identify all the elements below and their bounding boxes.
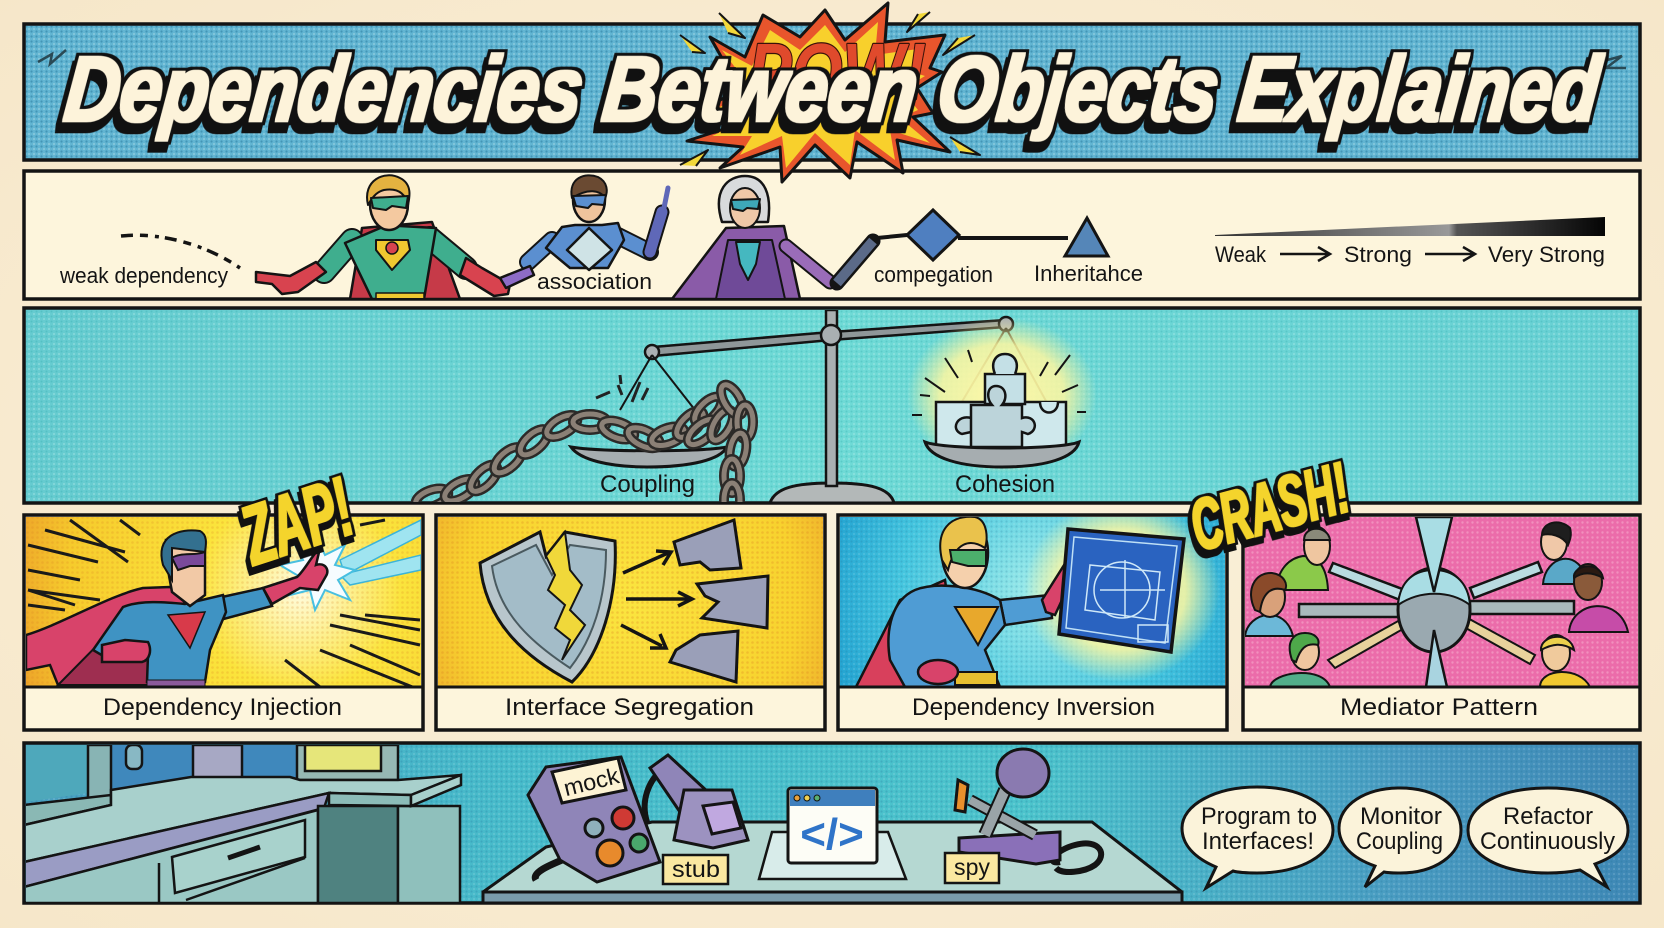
hero: blue hero: [500, 175, 668, 288]
card: mediator pattern: [1243, 515, 1640, 730]
illustration: cracked shield and shards: [436, 515, 825, 687]
label: stub: [663, 855, 728, 884]
panel: testing workbench: [24, 743, 1640, 903]
speech bubble: program to interfaces: [1182, 787, 1333, 888]
strength scale labels: Very Strong: [1488, 242, 1605, 267]
speech bubble: monitor coupling: [1339, 788, 1461, 887]
sound effect: ZAP: ZAP!: [229, 459, 364, 583]
dashed weak dependency line: [121, 235, 240, 268]
hero: green hero: [256, 175, 510, 300]
cohesion glow: [907, 317, 1097, 473]
strength scale labels: [1215, 242, 1605, 267]
left pan: [571, 447, 727, 467]
strength wedge: [1215, 217, 1605, 236]
illustration: kitchen counter: [24, 745, 461, 903]
icon: puzzle pieces: [936, 354, 1066, 448]
speech bubble: refactor continuously: Continuously: [1480, 828, 1615, 855]
card: interface segregation: [436, 515, 825, 730]
icon: code window: [788, 788, 877, 863]
hero: purple heroine: [672, 176, 830, 299]
label: dependency injection: Dependency Injection: [103, 694, 342, 721]
label: interface segregation: Interface Segregation: [505, 694, 754, 721]
icon: code window: </>: [800, 810, 864, 859]
card: dependency inversion: [838, 498, 1227, 730]
label: spy: [945, 853, 999, 883]
speech bubble: program to interfaces: Program to: [1201, 803, 1317, 830]
label: weak dependency: weak dependency: [59, 263, 228, 288]
speech bubble: refactor continuously: Refactor: [1503, 803, 1593, 830]
label: association: association: [537, 269, 652, 294]
panel: coupling vs cohesion balance: [24, 308, 1640, 517]
strength scale labels: Weak: [1215, 242, 1267, 267]
balance scale: [620, 310, 1052, 503]
panel: title banner: [24, 24, 1640, 160]
icon: inheritance triangle: [1065, 218, 1108, 256]
device: spy: [955, 749, 1101, 872]
speech bubble: monitor coupling: Monitor: [1360, 803, 1442, 830]
icon: glow rays: [912, 350, 1086, 415]
speech bubble: refactor continuously: [1468, 788, 1628, 887]
explosion burst: [680, 3, 980, 182]
card: dependency injection: [24, 515, 423, 730]
speech bubble: program to interfaces: Interfaces!: [1202, 828, 1314, 855]
arm and glove: [220, 588, 272, 620]
label: mediator pattern: Mediator Pattern: [1340, 694, 1538, 721]
panel: relationship strip: [24, 171, 1640, 300]
label: dependency inversion: Dependency Inversion: [912, 694, 1155, 721]
icon: heavy chain: [413, 375, 753, 517]
label: cohesion: Cohesion: [955, 471, 1055, 498]
label: inheritance: Inheritahce: [1034, 261, 1143, 286]
label: coupling: Coupling: [600, 471, 695, 498]
device: mock: [528, 757, 660, 882]
illustration: hero firing energy: [24, 515, 423, 690]
label: compegation: compegation: [874, 262, 993, 287]
illustration: hero with blueprint: [840, 517, 1225, 686]
illustration: table: [483, 822, 1182, 903]
label: spy: spy: [954, 854, 990, 880]
burst word: POW!: [748, 27, 926, 116]
device: stub: [645, 755, 748, 848]
paper sheet: [759, 832, 906, 879]
aggregation stick: [837, 241, 873, 283]
right pan: [925, 442, 1079, 467]
illustration: mediator hub with team: [1243, 515, 1640, 687]
strength scale labels: Strong: [1344, 242, 1412, 267]
sound effect: CRASH: CRASH!: [1182, 448, 1358, 567]
label: stub: stub: [672, 856, 720, 882]
icon: aggregation diamond line: [877, 210, 1068, 260]
speech bubble: monitor coupling: Coupling: [1356, 828, 1443, 855]
label: mock: mock: [561, 762, 622, 801]
